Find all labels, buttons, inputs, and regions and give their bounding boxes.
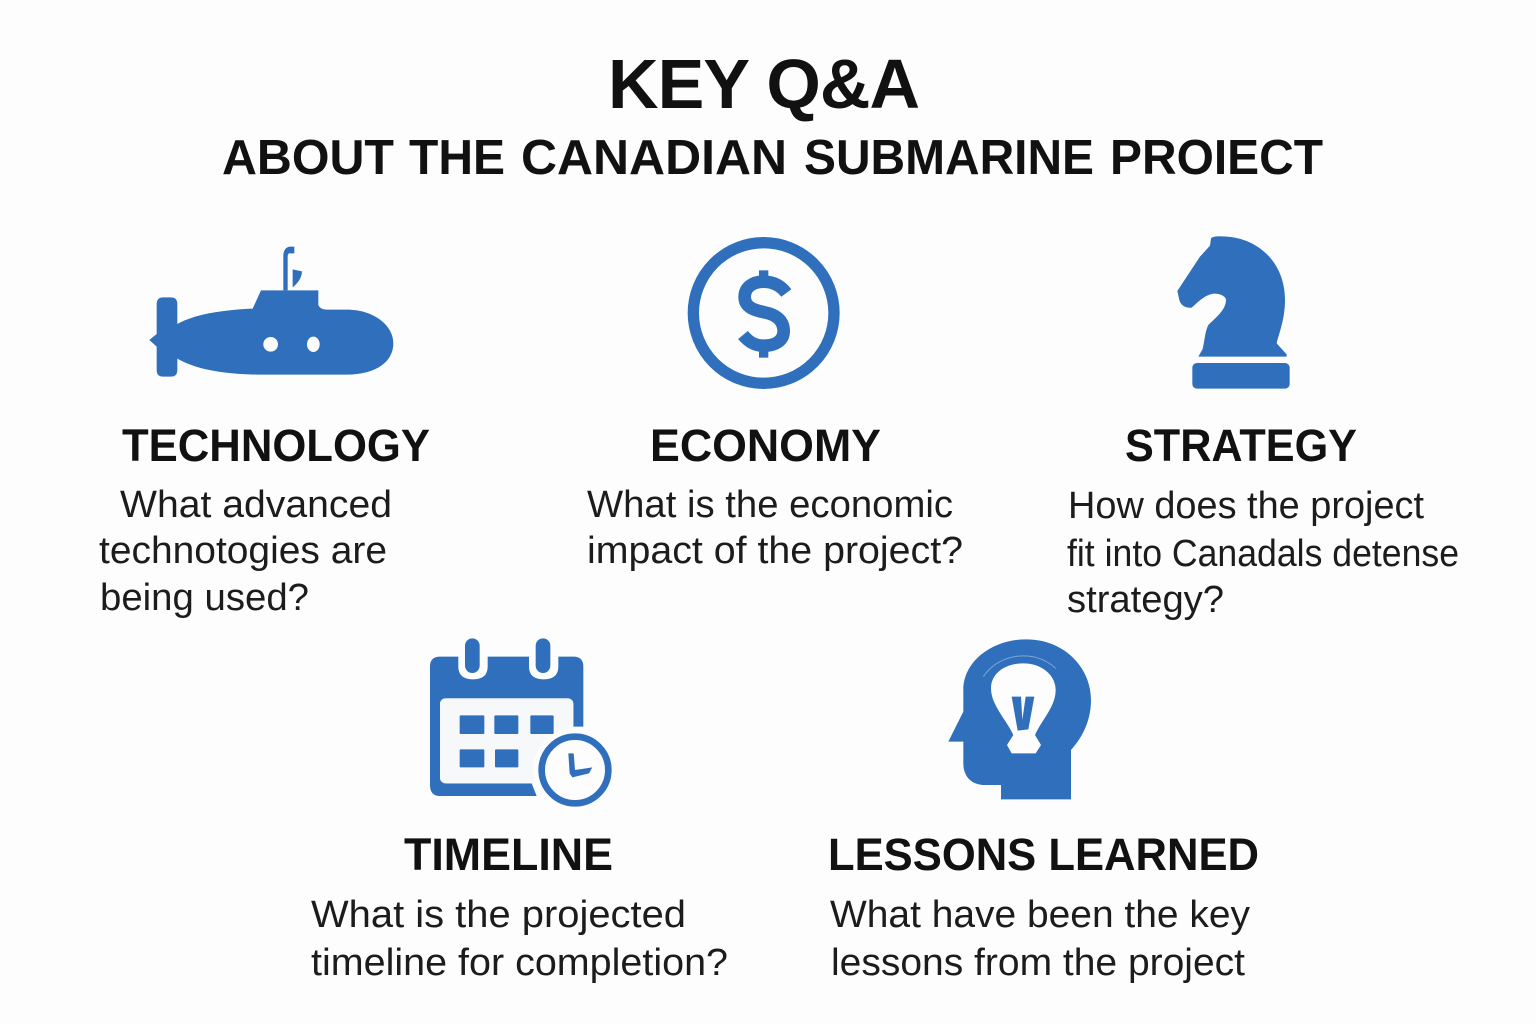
panel: technology (99, 247, 430, 619)
icon: calendar with clock (430, 638, 617, 812)
text: economy question (587, 484, 963, 572)
text: lessons question (830, 894, 1250, 984)
text: technology question: What advanced (120, 484, 392, 526)
heading: lessons learned: LESSONS LEARNED (828, 829, 1259, 880)
text: technology question: technotogies are (99, 530, 387, 572)
panel: economy (587, 243, 963, 572)
text: lessons question: lessons from the project (831, 942, 1245, 984)
text: strategy question: fit into Canadals detense (1067, 533, 1459, 575)
title: CANADIAN (521, 131, 787, 185)
panel: timeline (311, 638, 728, 984)
text: timeline question: What is the projected (311, 894, 686, 936)
text: technology question: being used? (100, 577, 309, 619)
panel: lessons learned (828, 639, 1259, 984)
text: economy question: What is the economic (587, 484, 953, 526)
title: ABOUT (222, 131, 394, 185)
text: technology question (99, 484, 392, 619)
title: PROIECT (1110, 131, 1323, 185)
heading: technology: TECHNOLOGY (122, 420, 430, 471)
icon: dollar coin (693, 243, 834, 383)
text: strategy question (1067, 485, 1459, 621)
icon: submarine (149, 247, 393, 377)
text: strategy question: strategy? (1067, 579, 1224, 621)
title: THE (409, 131, 505, 185)
heading: strategy: STRATEGY (1125, 420, 1357, 471)
text: lessons question: What have been the key (830, 894, 1250, 936)
icon: chess knight (1177, 236, 1290, 389)
icon: head with light bulb (948, 639, 1091, 799)
text: economy question: impact of the project? (587, 530, 963, 572)
heading: timeline: TIMELINE (404, 829, 613, 880)
title: KEY Q&A (608, 45, 920, 123)
heading: economy: ECONOMY (650, 420, 881, 471)
panel: strategy (1067, 236, 1459, 621)
text: timeline question: timeline for completion? (311, 942, 728, 984)
title (222, 45, 1323, 185)
text: timeline question (311, 894, 728, 984)
text: strategy question: How does the project (1068, 485, 1424, 527)
title: SUBMARINE (804, 131, 1094, 185)
